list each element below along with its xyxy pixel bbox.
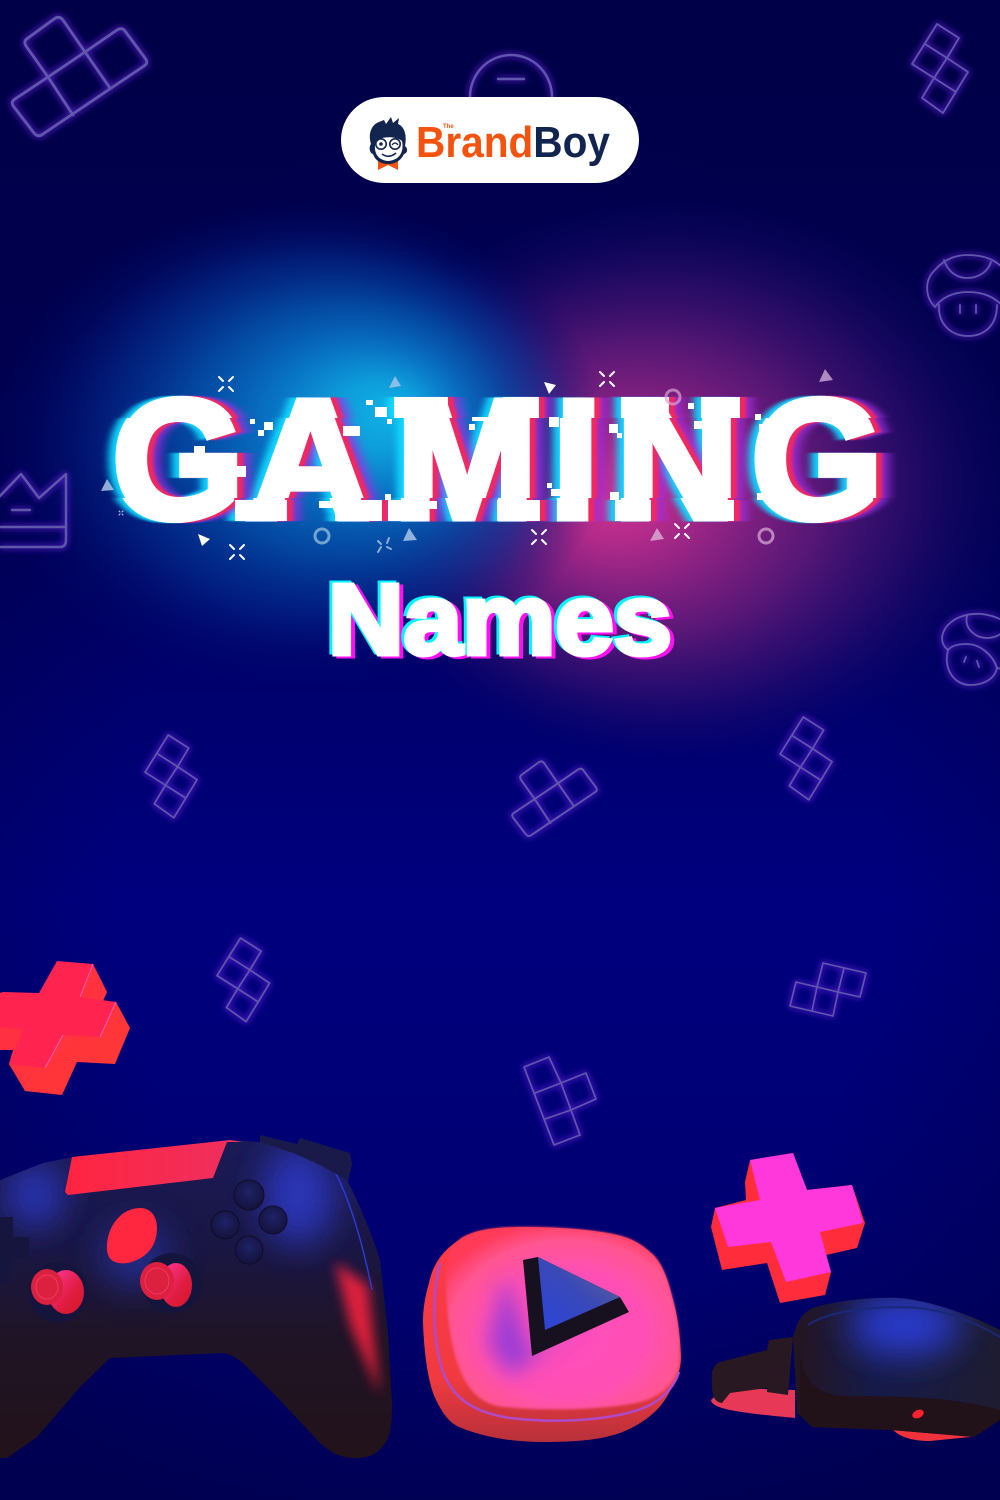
icon: mushroom top right	[927, 255, 1000, 336]
play button shadow	[488, 1275, 595, 1375]
controller d-pad	[0, 1217, 29, 1283]
controller right stick	[140, 1253, 202, 1313]
neon outline background icons	[0, 17, 1000, 1145]
icon: tetris T top left	[12, 17, 147, 136]
sparkle rings	[315, 390, 773, 543]
play triangle	[523, 1257, 629, 1356]
play button	[423, 1227, 681, 1442]
game controller	[0, 1135, 392, 1458]
controller face buttons	[211, 1180, 287, 1264]
icon: tetris T center	[512, 761, 597, 836]
icon: tetris S lower right	[790, 963, 866, 1016]
play button rim	[434, 1263, 679, 1421]
play button cushion	[446, 1227, 680, 1409]
icon: tetris Z lower left	[217, 938, 270, 1022]
icon: crown left	[0, 474, 66, 547]
VR headset	[711, 1295, 1000, 1441]
logo wordmark: BrandBoy	[416, 118, 610, 167]
icon: tetris Z right middle	[780, 717, 832, 800]
glitch pixels	[186, 400, 845, 509]
icon: tetris Z top right	[912, 24, 968, 113]
title: GAMING: GAMING	[112, 365, 883, 555]
controller bumper	[260, 1135, 352, 1185]
VR strap	[712, 1337, 793, 1403]
red plus	[0, 961, 130, 1095]
play button base	[423, 1227, 681, 1442]
controller center oval	[107, 1208, 157, 1263]
icon: tetris Z left middle	[145, 735, 197, 818]
VR red light	[911, 1408, 925, 1420]
icon: tetris T lower center	[524, 1057, 596, 1145]
controller red top panel	[65, 1140, 243, 1195]
controller left stick	[28, 1262, 88, 1322]
icon: mushroom right	[942, 614, 1000, 685]
sparkle crosses	[119, 372, 689, 559]
controller lighting	[7, 1145, 380, 1395]
logo small word: The	[443, 124, 454, 130]
controller body	[0, 1140, 392, 1458]
logo pill	[341, 97, 639, 183]
VR lighting	[800, 1295, 1000, 1440]
icon: half circle top	[470, 55, 552, 97]
sparkles around title	[101, 369, 833, 559]
VR red strap inner	[711, 1388, 795, 1418]
icon: logo boy mascot	[370, 117, 407, 170]
magenta plus	[711, 1153, 865, 1303]
sparkle triangles	[101, 369, 833, 546]
VR red underside	[891, 1425, 985, 1441]
subtitle: Names: Names	[328, 564, 672, 676]
VR body	[793, 1298, 1000, 1437]
